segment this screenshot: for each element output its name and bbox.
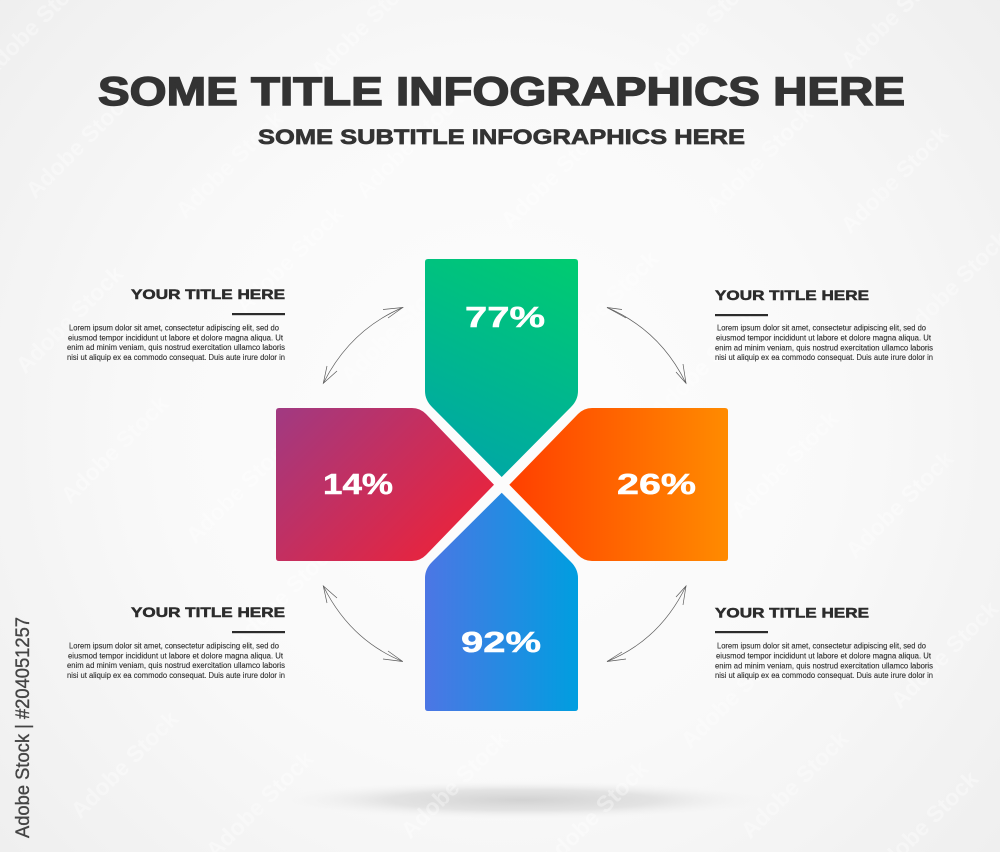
- text block: top left: [67, 287, 285, 362]
- watermark pattern: Adobe Stock: [170, 105, 288, 223]
- body copy: nisi ut aliquip ex ea commodo consequat. Duis aute irure dolor in: [67, 352, 285, 362]
- watermark pattern: Adobe Stock: [840, 445, 958, 563]
- watermark pattern: Adobe Stock: [675, 635, 793, 753]
- body copy: nisi ut aliquip ex ea commodo consequat. Duis aute irure dolor in: [67, 670, 285, 680]
- watermark pattern: Adobe Stock: [885, 595, 1000, 713]
- watermark pattern: Adobe Stock: [230, 200, 348, 318]
- body copy: [67, 322, 285, 362]
- body copy: [715, 641, 933, 680]
- text block: top right: [715, 288, 933, 362]
- arrow: top left: [323, 308, 403, 383]
- text block: bottom right: [715, 606, 933, 680]
- watermark pattern: Adobe Stock: [335, 270, 453, 388]
- value: 26%: 26%: [617, 469, 696, 501]
- panel: left 14%: [276, 408, 494, 561]
- rule: [232, 313, 285, 315]
- watermark pattern: Adobe Stock: [700, 100, 818, 218]
- rule: [715, 314, 768, 316]
- watermark pattern: Adobe Stock: [20, 85, 138, 203]
- heading: YOUR TITLE HERE: [131, 287, 285, 302]
- watermark pattern: Adobe Stock: [180, 430, 298, 548]
- watermark pattern: Adobe Stock: [55, 390, 173, 508]
- watermark pattern: Adobe Stock: [225, 535, 343, 653]
- watermark pattern: Adobe Stock: [735, 725, 853, 843]
- rule: [715, 631, 768, 633]
- value: 77%: 77%: [465, 302, 545, 334]
- panel: right 26%: [509, 408, 728, 561]
- text block: bottom left: [67, 605, 285, 680]
- body copy: [67, 640, 285, 680]
- watermark pattern: Adobe Stock: [545, 245, 663, 363]
- body copy: eiusmod tempor incididunt ut labore et dolore magna aliqua. Ut: [68, 332, 284, 342]
- floor shadow: [277, 781, 767, 819]
- body copy: enim ad minim veniam, quis nostrud exercitation ullamco laboris: [715, 342, 933, 352]
- body copy: enim ad minim veniam, quis nostrud exercitation ullamco laboris: [67, 660, 285, 670]
- body copy: eiusmod tempor incididunt ut labore et dolore magna aliqua. Ut: [716, 332, 932, 342]
- value: 92%: 92%: [461, 627, 541, 659]
- body copy: nisi ut aliquip ex ea commodo consequat. Duis aute irure dolor in: [715, 352, 933, 362]
- watermark pattern: Adobe Stock: [495, 115, 613, 233]
- arrow: bottom left: [323, 586, 403, 662]
- heading: YOUR TITLE HERE: [715, 606, 869, 620]
- body copy: eiusmod tempor incididunt ut labore et dolore magna aliqua. Ut: [716, 650, 932, 660]
- body copy: Lorem ipsum dolor sit amet, consectetur adipiscing elit, sed do: [69, 322, 279, 332]
- body copy: Lorem ipsum dolor sit amet, consectetur adipiscing elit, sed do: [69, 640, 279, 650]
- body copy: nisi ut aliquip ex ea commodo consequat. Duis aute irure dolor in: [715, 670, 933, 680]
- title: SOME TITLE INFOGRAPHICS HERE: [98, 70, 905, 114]
- watermark pattern: Adobe Stock: [395, 725, 513, 843]
- watermark pattern: Adobe Stock: [725, 405, 843, 523]
- body copy: eiusmod tempor incididunt ut labore et dolore magna aliqua. Ut: [68, 650, 284, 660]
- value: 14%: 14%: [323, 469, 393, 501]
- body copy: Lorem ipsum dolor sit amet, consectetur adipiscing elit, sed do: [717, 323, 926, 333]
- heading: YOUR TITLE HERE: [715, 288, 869, 303]
- heading: YOUR TITLE HERE: [131, 605, 285, 620]
- watermark pattern: Adobe Stock: [10, 260, 128, 378]
- watermark pattern: Adobe Stock: [65, 705, 183, 823]
- body copy: [715, 323, 933, 362]
- arrow: top right: [607, 308, 686, 383]
- body copy: enim ad minim veniam, quis nostrud exercitation ullamco laboris: [67, 342, 285, 352]
- panel: bottom 92%: [425, 493, 578, 711]
- subtitle: SOME SUBTITLE INFOGRAPHICS HERE: [258, 125, 745, 149]
- body copy: Lorem ipsum dolor sit amet, consectetur adipiscing elit, sed do: [717, 641, 926, 651]
- watermark pattern: Adobe Stock: [350, 85, 468, 203]
- watermark pattern: Adobe Stock: [835, 120, 953, 238]
- rule: [232, 631, 285, 633]
- watermark pattern: Adobe Stock: [645, 305, 763, 423]
- panel: top 77%: [425, 259, 578, 477]
- stock id label: Adobe Stock | #204051257: [13, 617, 34, 838]
- arrow: bottom right: [607, 586, 686, 662]
- body copy: enim ad minim veniam, quis nostrud exercitation ullamco laboris: [715, 660, 933, 670]
